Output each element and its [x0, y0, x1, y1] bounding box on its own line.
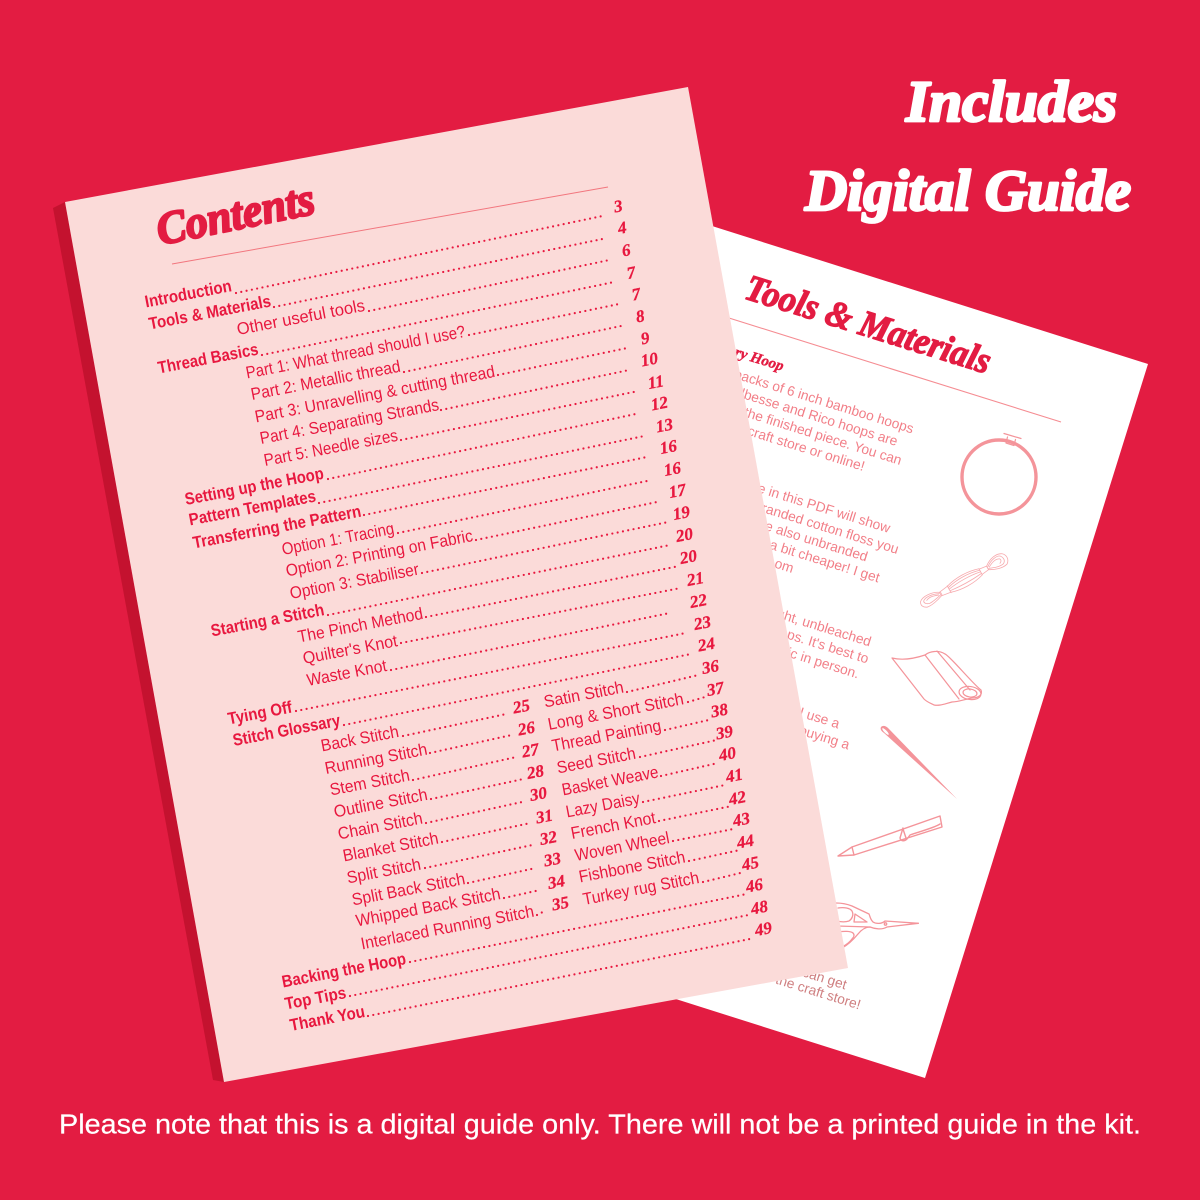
page numbers: main column: 22 — [687, 590, 709, 612]
stitch glossary left column: Running Stitch — [323, 740, 429, 778]
stitch glossary left column: Blanket Stitch — [341, 829, 440, 865]
headline: Includes Digital Guide: Digital Guide — [804, 158, 1131, 223]
contents subsection entries — [235, 296, 496, 690]
page numbers: main column: 20 — [677, 546, 699, 568]
stitch glossary left column: Interlaced Running Stitch — [359, 902, 536, 953]
page numbers: glossary left column: 35 — [549, 892, 571, 915]
page drop shadow — [53, 202, 224, 1082]
contents subsection entries: Part 4: Separating Strands — [258, 395, 441, 448]
body text: tools descriptions: can get — [801, 965, 849, 992]
contents subsection entries: Part 2: Metallic thread — [249, 357, 402, 404]
contents subsection entries: Option 3: Stabiliser — [288, 560, 421, 603]
body text: tools descriptions: ric in person. — [781, 644, 861, 681]
page numbers: glossary left column: 32 — [537, 827, 559, 849]
icon: floss skein — [918, 551, 1010, 611]
page numbers: glossary left column: 27 — [519, 739, 542, 762]
panel: Contents page — [65, 87, 848, 1082]
contents section titles — [143, 276, 408, 1035]
page numbers: main column: 24 — [695, 634, 716, 656]
stitch glossary left column: Whipped Back Stitch — [354, 884, 502, 930]
page numbers: main column: 7 — [625, 262, 639, 283]
page numbers: main column: 20 — [673, 524, 695, 546]
stitch glossary left column: Outline Stitch — [332, 785, 429, 821]
page numbers: main column: 49 — [752, 918, 774, 940]
contents section titles: Thank You — [288, 1002, 366, 1035]
stitch glossary right column: French Knot — [569, 808, 657, 843]
body text: tools descriptions: a bit cheaper! I get — [768, 537, 882, 585]
stitch glossary right column: Fishbone Stitch — [577, 848, 687, 886]
contents subsection entries: Option 1: Tracing — [280, 519, 396, 559]
page numbers: main column: 19 — [671, 502, 692, 524]
stitch glossary left column: Chain Stitch — [336, 809, 424, 843]
body text: tools descriptions: ng the finished piece. You can — [724, 399, 904, 468]
contents section titles: Transferring the Pattern — [191, 502, 363, 552]
body text: tools descriptions: buying a — [797, 723, 852, 752]
page numbers: main column: 8 — [634, 306, 647, 326]
page heading: Tools & Materials: Tools & Materials — [740, 267, 996, 382]
headline: Includes Digital Guide — [804, 69, 1131, 223]
contents section titles: Backing the Hoop — [280, 949, 408, 991]
stitch glossary left column — [319, 722, 536, 953]
contents subsection entries: Option 2: Printing on Fabric — [284, 526, 475, 580]
stitch glossary right column: Woven Wheel — [573, 828, 671, 865]
contents subsection entries: The Pinch Method — [296, 604, 425, 646]
page numbers: main column — [611, 196, 774, 940]
contents section titles: Thread Basics — [156, 340, 260, 377]
page numbers: main column: 9 — [639, 328, 652, 348]
contents subsection entries: Part 3: Unravelling & cutting thread — [253, 362, 496, 426]
page numbers: main column: 41 — [723, 765, 744, 787]
body text: tools descriptions: stranded cotton floss you — [750, 497, 901, 557]
stitch glossary right column: Basket Weave — [560, 762, 660, 799]
stitch glossary left column: Split Back Stitch — [350, 869, 467, 909]
page numbers: main column: 36 — [699, 656, 721, 678]
contents subsection entries: Part 5: Needle sizes — [262, 426, 399, 470]
contents subsection entries: Other useful tools — [235, 296, 366, 339]
page numbers: glossary left column: 26 — [515, 717, 537, 740]
stitch glossary left column: Back Stitch — [319, 722, 400, 755]
stitch glossary left column: Stem Stitch — [328, 766, 411, 799]
body text: tools descriptions: re also unbranded — [759, 517, 870, 564]
contents section titles: Tying Off — [226, 698, 294, 728]
contents section titles: Pattern Templates — [187, 487, 317, 529]
headline: Includes Digital Guide: Includes — [905, 69, 1117, 134]
footer note: Please note that this is a digital guide only. There will not be a printed guide in the kit. — [59, 1108, 1141, 1140]
body text: tools descriptions: ops. It's best to — [778, 625, 871, 666]
page numbers: main column: 17 — [667, 480, 689, 502]
body text: tools descriptions: ide in this PDF will show — [746, 477, 892, 536]
icon: pen — [838, 816, 942, 856]
page numbers: main column: 10 — [639, 348, 660, 370]
page numbers: main column: 38 — [708, 699, 730, 722]
body text: tools descriptions: ght, unbleached — [775, 606, 873, 649]
page numbers: main column: 13 — [654, 414, 675, 436]
stitch glossary right column — [542, 678, 701, 909]
page numbers: main column: 48 — [748, 896, 770, 919]
page numbers: main column: 11 — [646, 371, 666, 393]
stitch glossary right column: Seed Stitch — [555, 744, 637, 777]
icon: embroidery hoop — [962, 434, 1036, 514]
panel: Tools & Materials page — [660, 226, 1148, 1078]
page numbers: glossary left column: 31 — [533, 806, 554, 828]
body text: tools descriptions — [723, 363, 916, 1012]
contents section titles: Top Tips — [283, 983, 348, 1013]
page numbers: glossary left column: 33 — [541, 848, 563, 871]
page numbers: main column: 4 — [615, 218, 628, 238]
heading: Contents: Contents — [152, 173, 319, 255]
page numbers: main column: 45 — [739, 852, 761, 875]
contents section titles: Setting up the Hoop — [183, 464, 325, 509]
contents section titles: Introduction — [143, 276, 233, 311]
page numbers: main column: 40 — [716, 743, 738, 765]
contents subsection entries: Part 1: What thread should I use? — [244, 322, 467, 382]
page numbers: main column: 44 — [734, 831, 755, 853]
stitch glossary right column: Lazy Daisy — [564, 789, 642, 821]
body text: tools descriptions: ltipacks of 6 inch bamboo hoops — [723, 363, 916, 436]
stitch glossary right column: Satin Stitch — [542, 678, 625, 711]
page numbers: main column: 16 — [662, 458, 683, 480]
body text: tools descriptions: I use a — [798, 705, 842, 731]
icon: scissors — [836, 903, 918, 948]
body text: tools descriptions: om — [773, 556, 796, 576]
dot leaders — [236, 216, 753, 1016]
contents section titles: Stitch Glossary — [231, 711, 342, 750]
stitch glossary right column: Long & Short Stitch — [546, 689, 685, 734]
contents subsection entries: Quilter's Knot — [301, 631, 399, 668]
body text: tools descriptions: l Elbesse and Rico hoops are — [724, 381, 900, 449]
page numbers: main column: 6 — [620, 240, 633, 260]
stitch glossary left column: Split Stitch — [345, 855, 422, 887]
contents section titles: Tools & Materials — [147, 292, 273, 333]
page numbers: main column: 23 — [691, 612, 713, 634]
body text: tools descriptions: l craft store or online! — [739, 421, 867, 474]
stitch glossary right column: Thread Painting — [550, 716, 663, 755]
page numbers: glossary left column: 30 — [527, 783, 549, 805]
page numbers: main column: 39 — [713, 721, 735, 744]
page numbers: main column: 37 — [704, 678, 727, 700]
page numbers: glossary left column: 28 — [524, 761, 546, 783]
contents section titles: Starting a Stitch — [209, 600, 326, 640]
icon: needle — [881, 726, 957, 799]
stitch glossary right column: Turkey rug Stitch — [581, 868, 701, 909]
icon: fabric roll — [892, 651, 982, 705]
page numbers: main column: 43 — [730, 808, 752, 831]
page numbers: main column: 3 — [611, 196, 625, 217]
page numbers: glossary left column: 34 — [545, 871, 566, 893]
page numbers: main column: 16 — [658, 436, 679, 458]
page numbers: main column: 7 — [630, 284, 644, 304]
page numbers: main column: 12 — [649, 392, 670, 414]
page numbers: glossary left column — [510, 695, 571, 915]
page numbers: main column: 21 — [684, 568, 705, 590]
page numbers: main column: 42 — [726, 787, 748, 809]
page numbers: glossary left column: 25 — [510, 695, 532, 718]
page numbers: main column: 46 — [743, 874, 765, 897]
contents subsection entries: Waste Knot — [305, 656, 389, 690]
body text: tools descriptions: to the craft store! — [759, 967, 863, 1012]
subheading: Embroidery Hoop: Embroidery Hoop — [674, 326, 786, 375]
